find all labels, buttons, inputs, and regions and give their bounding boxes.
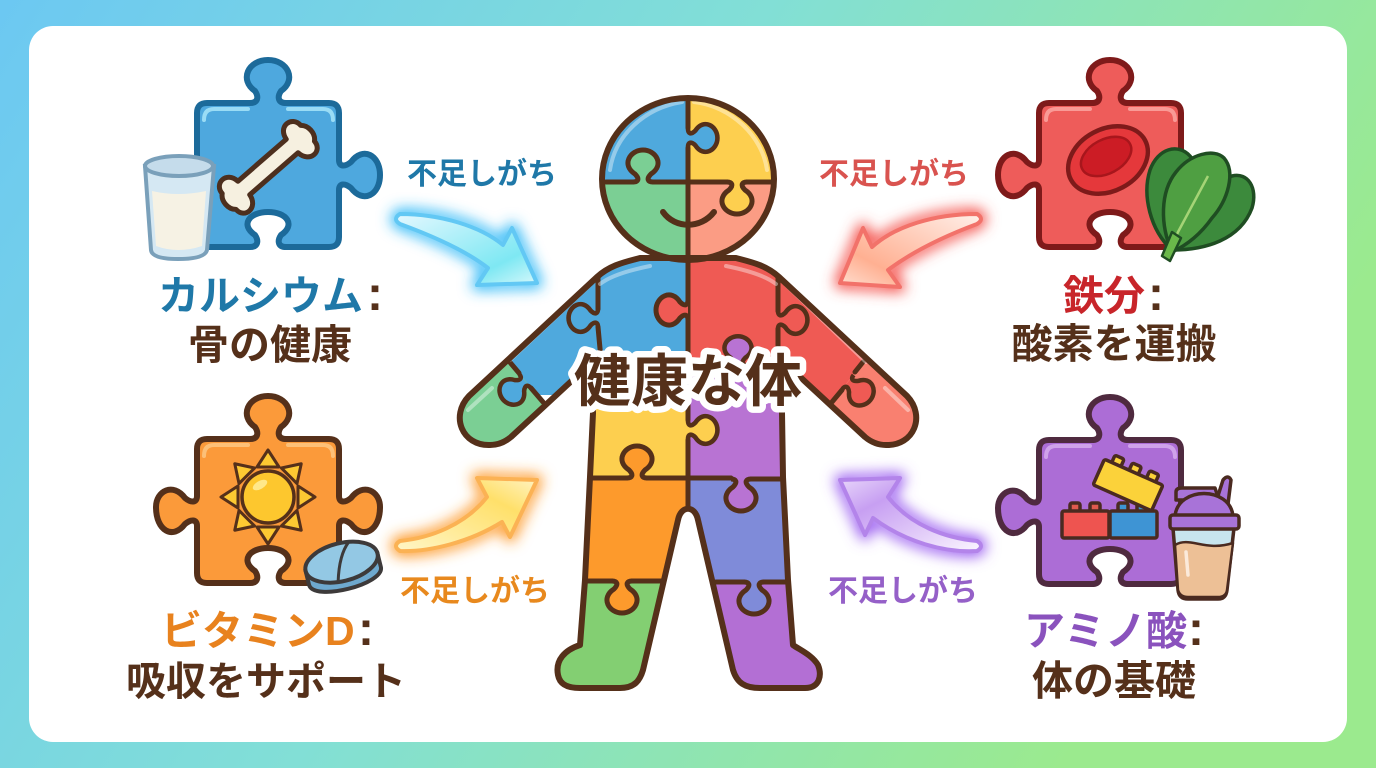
panel: calcium [145, 60, 383, 368]
label: amino acids: アミノ酸 [1024, 608, 1187, 654]
panel: amino acids [998, 397, 1239, 704]
icon: orange puzzle piece [156, 396, 380, 583]
panel: iron [998, 60, 1254, 367]
icon: glass of milk [145, 156, 214, 259]
label: supports absorption: 吸収をサポート [126, 660, 406, 704]
label: calcium: : [367, 268, 383, 321]
label: body foundation: 体の基礎 [1032, 658, 1196, 704]
icon: red puzzle piece [998, 60, 1181, 247]
arrow: orange [396, 478, 537, 551]
icon: bone [212, 115, 324, 220]
arrow: red [840, 214, 981, 287]
panel: vitamin D [126, 396, 406, 704]
central puzzle body figure [440, 90, 930, 697]
icon: red blood cell [1056, 113, 1160, 207]
label: calcium: カルシウム [158, 273, 363, 319]
icon: protein shaker [1170, 477, 1239, 599]
icon: purple puzzle piece [998, 397, 1181, 584]
label: vitamin D: ビタミンD [161, 608, 355, 654]
icon: sun [221, 450, 315, 544]
body colour pieces [462, 101, 914, 685]
label: iron: 鉄分 [1063, 273, 1145, 319]
icon: tablet [301, 535, 384, 598]
smile [663, 212, 714, 225]
label: deficient blue: 不足しがち [407, 157, 557, 191]
silhouette outline [460, 258, 916, 688]
label: deficient purple: 不足しがち [828, 574, 978, 608]
label: amino acids: : [1188, 603, 1204, 656]
label: bone health: 骨の健康 [188, 322, 352, 368]
central title: 健康な体 [574, 350, 802, 414]
icon: building blocks [1062, 452, 1166, 538]
arrow: purple [840, 478, 981, 551]
label: oxygen transport: 酸素を運搬 [1012, 321, 1216, 367]
arrow: blue [396, 214, 537, 285]
icon: blue puzzle piece [197, 60, 380, 247]
icon: spinach [1147, 149, 1254, 261]
label: vitamin D: : [358, 603, 374, 656]
label: deficient orange: 不足しがち [400, 574, 550, 608]
label: deficient red: 不足しがち [819, 157, 969, 191]
label: iron: : [1148, 268, 1164, 321]
